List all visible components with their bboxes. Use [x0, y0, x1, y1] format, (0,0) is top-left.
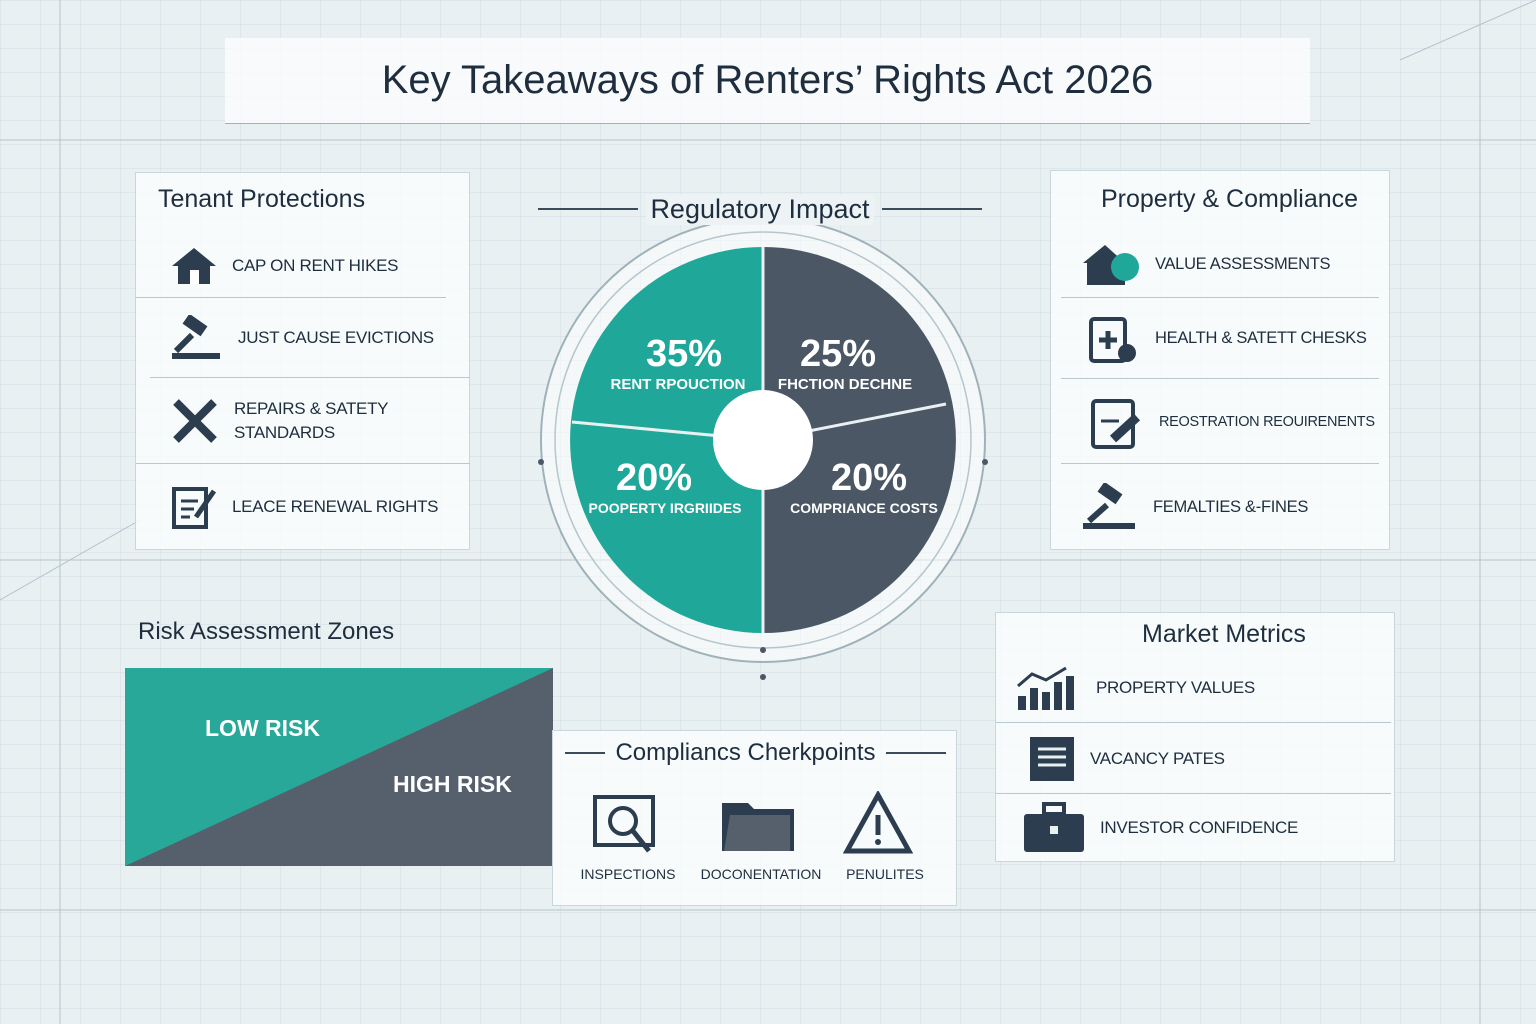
pie chart: COMPRIANCE COSTS: [790, 500, 938, 516]
panel: tenant protections: [135, 172, 470, 550]
item: penalties & fines: FEMALTIES &-FINES: [1153, 498, 1308, 516]
item: health & safety: [1061, 299, 1379, 379]
heading: risk assessment zones: Risk Assessment Zones: [138, 618, 394, 645]
heading: property & compliance: Property & Compliance: [1101, 185, 1358, 213]
item: property values: PROPERTY VALUES: [1096, 678, 1255, 696]
item: registration: REOSTRATION REOUIRENENTS: [1159, 414, 1375, 430]
pie chart: RENT RPOUCTION: [610, 376, 746, 393]
item: just cause evictions: [150, 299, 470, 378]
icon: inspections: [593, 795, 655, 852]
label: documentation: DOCONENTATION: [701, 866, 821, 882]
title: Key Takeaways of Renters’ Rights Act 2026: [382, 58, 1153, 102]
item: vacancy rates: [996, 724, 1391, 794]
item: penalties & fines: [1083, 483, 1308, 529]
pie chart: 20%: [616, 457, 692, 499]
label: inspections: INSPECTIONS: [581, 866, 675, 882]
item: vacancy rates: VACANCY PATES: [1090, 748, 1225, 768]
label: penalties: PENULITES: [846, 866, 924, 882]
heading: compliance checkpoints: Compliancs Cherkpoints: [615, 739, 876, 766]
item: investor confidence: [1024, 802, 1298, 852]
item: repairs & safety: [136, 379, 470, 464]
pie chart: 25%: [800, 333, 876, 375]
risk chart: HIGH RISK: [393, 771, 512, 797]
item: cap on rent hikes: CAP ON RENT HIKES: [232, 256, 398, 275]
panel: property & compliance: [1050, 170, 1390, 550]
title: [225, 38, 1310, 124]
item: lease renewal: [172, 487, 438, 529]
item: just cause evictions: JUST CAUSE EVICTIONS: [238, 328, 434, 347]
pie chart: FHCTION DECHNE: [778, 376, 912, 393]
pie chart: 35%: [646, 333, 722, 375]
heading: tenant protections: Tenant Protections: [158, 185, 365, 213]
item: repairs & safety: STANDARDS: [234, 423, 335, 442]
heading: regulatory impact: Regulatory Impact: [650, 194, 870, 224]
pie chart: 20%: [831, 457, 907, 499]
item: cap on rent hikes: [136, 235, 446, 298]
item: repairs & safety: REPAIRS & SATETY: [234, 399, 388, 418]
heading: market metrics: Market Metrics: [1142, 620, 1306, 648]
item: property values: [996, 653, 1391, 723]
item: lease renewal: LEACE RENEWAL RIGHTS: [232, 497, 438, 516]
pie chart: POOPERTY IRGRIIDES: [588, 500, 742, 516]
risk chart: LOW RISK: [205, 715, 320, 741]
pie chart: [538, 225, 988, 680]
item: investor confidence: INVESTOR CONFIDENCE: [1100, 818, 1298, 837]
item: registration: [1061, 380, 1379, 464]
item: health & safety: HEALTH & SATETT CHESKS: [1155, 329, 1367, 347]
icon: documentation: [722, 803, 794, 851]
item: value assessments: [1061, 231, 1379, 298]
icon: penalties: [843, 791, 913, 854]
item: value assessments: VALUE ASSESSMENTS: [1155, 254, 1330, 272]
panel: compliance checkpoints: [552, 730, 957, 906]
risk chart: [125, 668, 553, 866]
panel: market metrics: [995, 612, 1395, 862]
